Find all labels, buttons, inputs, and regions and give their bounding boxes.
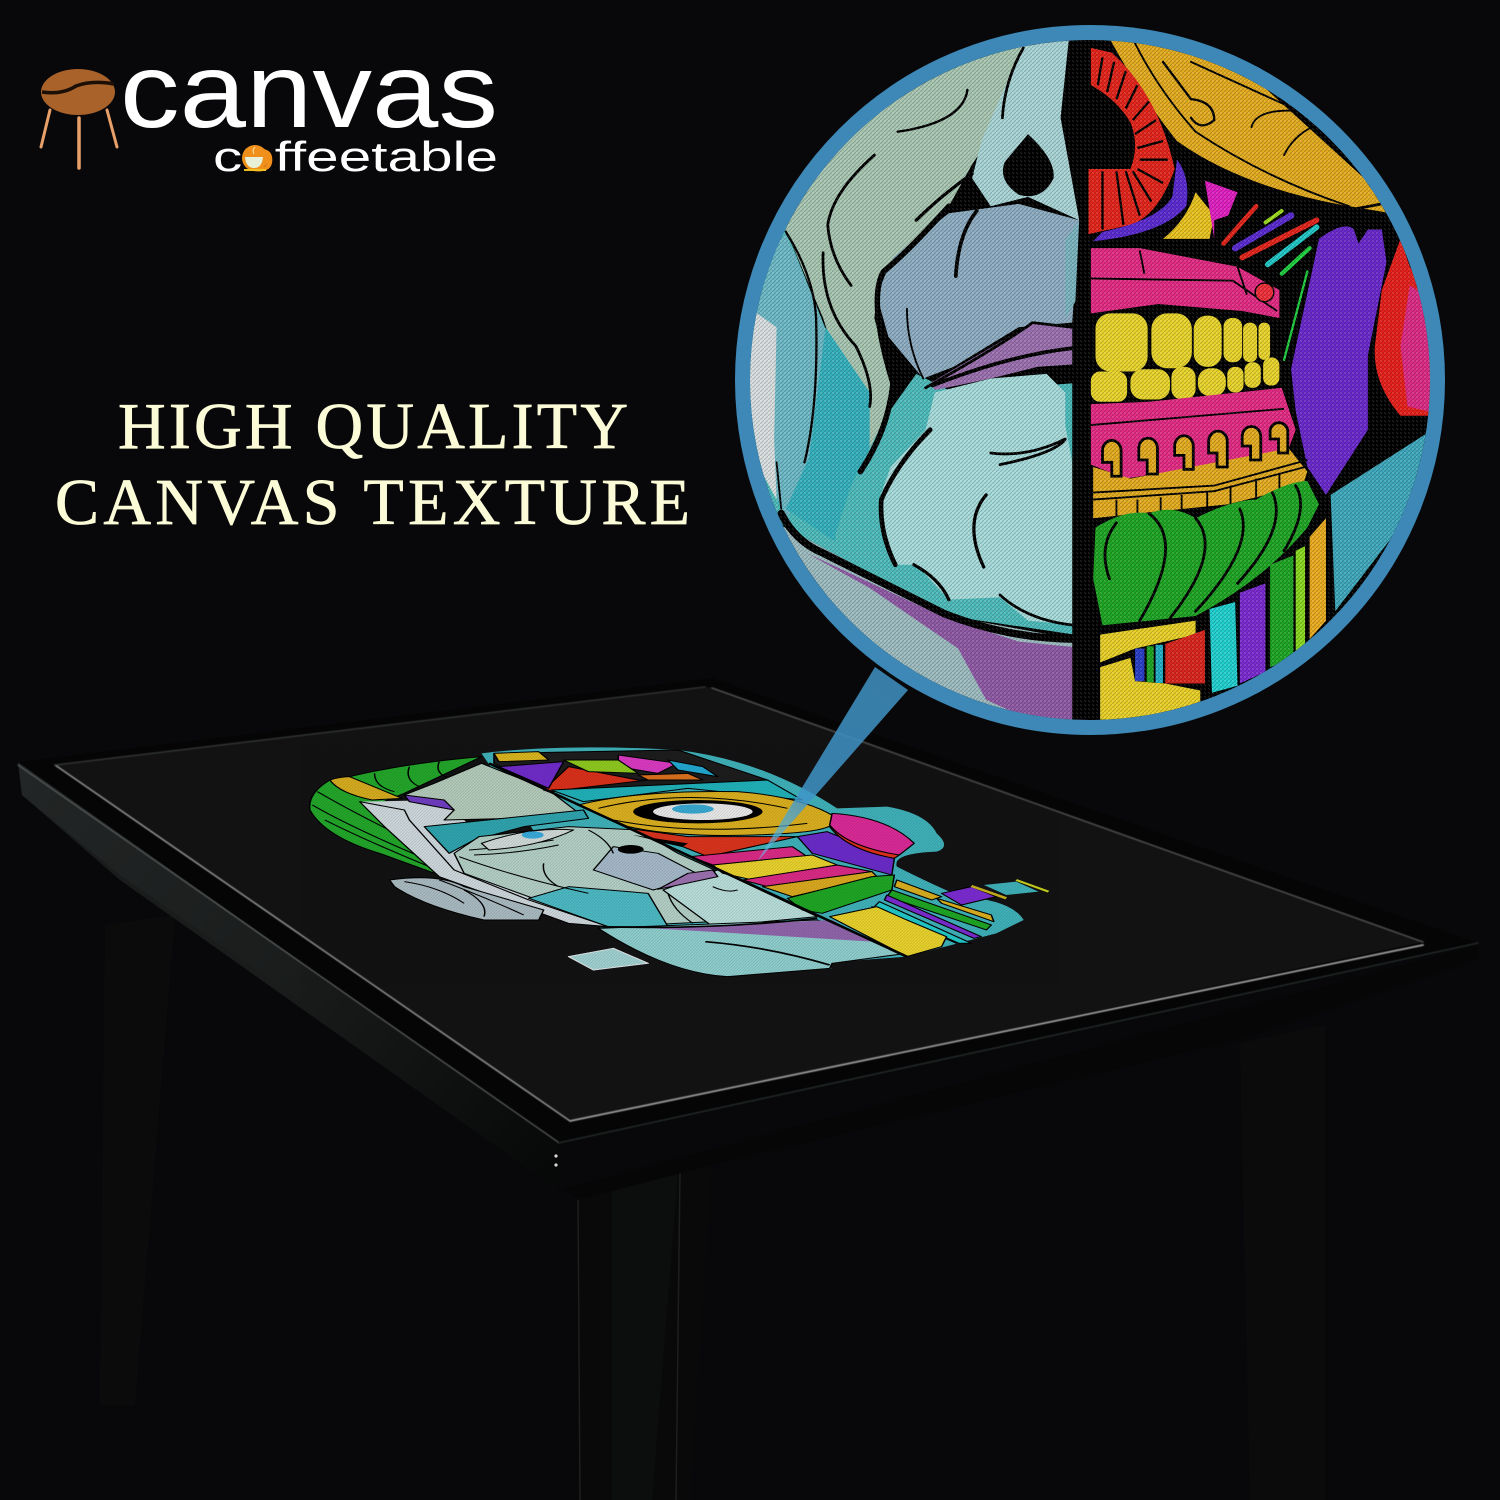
artwork black socket shadow [633,835,688,847]
left half colour areas [739,29,1089,746]
headline line 1: HIGH QUALITY [118,390,628,463]
gum details [1091,250,1277,311]
artwork hair strands [312,762,449,867]
table legs [100,915,1325,1500]
artwork red disc base [830,820,899,858]
artwork right tail [942,880,1049,905]
artwork teal brow [424,810,588,853]
nostril [1003,134,1054,196]
artwork face wrinkles [459,830,738,923]
artwork teal cheek [529,887,668,927]
artwork ear lines [404,880,524,917]
artwork forehead [404,763,583,820]
left half base colours [750,230,1084,720]
artwork green tongue [787,875,894,913]
table [18,678,1478,1500]
table frame side [18,762,558,1190]
fan ink rays [1098,57,1168,230]
table frame left highlight [18,762,300,1000]
artwork divider [489,763,907,957]
gold jaw [1093,448,1307,518]
lens backing [743,33,1437,727]
red muscle fan [1089,48,1175,234]
headline [55,390,690,539]
artwork purple collar [653,920,872,942]
small muscle shapes [1093,160,1238,241]
right side areas [1107,25,1447,611]
centre black stripe [1060,40,1088,720]
lens artwork [750,40,1430,720]
callout beam [757,667,908,862]
table surface edge highlights [18,687,1478,1143]
logo [41,32,498,180]
artwork neck bolt [569,948,648,970]
artwork pale base [360,800,608,927]
left half ink lines [777,48,1079,639]
artwork blue cheek [593,847,703,890]
table surface [55,687,1423,1121]
table top frame [18,678,1478,1143]
table apron [18,790,1478,1200]
artwork left eye [481,829,574,850]
tooth roots [1102,423,1288,476]
artwork red neck block [872,907,957,943]
lower teeth [1091,358,1279,402]
jaw ink lines [1093,460,1307,518]
artwork teeth [713,855,837,880]
logo icon: coffee cup [242,145,268,171]
artwork magenta disc [830,813,914,855]
tongue folds [1105,486,1301,621]
artwork neck stripes [874,880,994,943]
logo wordmark: coffeetable: coffeetable [213,133,498,180]
upper gum [1091,248,1279,318]
artwork green hair [310,757,481,875]
artwork canvas texture [300,745,1060,985]
lower gum [1091,388,1296,479]
lower yellow jaw [1100,620,1205,720]
lens blue ring [742,32,1438,728]
lower gum line [1091,409,1284,425]
headline line 2: CANVAS TEXTURE [55,466,690,539]
artwork teal band [551,780,802,802]
ink lines gold area [1135,43,1382,211]
artwork third eye [578,791,836,836]
artwork purple muscle [797,832,894,875]
artwork lower gum [743,865,872,887]
artwork ear [389,878,544,920]
colour stripes [1210,518,1326,693]
artwork red socket [628,828,797,857]
artwork pale strip [360,802,608,927]
artwork gold jaw [763,872,877,897]
lens canvas texture [740,30,1440,730]
artwork neck [598,920,907,977]
artwork upper gum [690,847,807,865]
green tongue [1093,481,1319,625]
artwork lips [658,870,718,889]
artwork chin [663,870,817,927]
artwork teal silhouette [481,747,1024,977]
artwork yellow jaw [830,907,947,957]
artwork face [454,827,817,927]
magnified canvas lens [730,25,1447,746]
table corner screws [554,1154,558,1167]
artwork jaw line [598,918,830,965]
artwork brain colour blocks [494,750,768,792]
artwork gold patch [330,777,402,800]
gum red dot [1255,283,1274,302]
upper teeth [1095,313,1270,372]
artwork nostril [618,845,644,854]
logo wordmark: canvas: canvas [120,32,498,150]
logo icon: coffee bean stool [41,69,117,168]
table artwork: split face [310,747,1049,977]
small coloured stripes [1224,206,1317,360]
artwork purple fleck [404,795,454,810]
